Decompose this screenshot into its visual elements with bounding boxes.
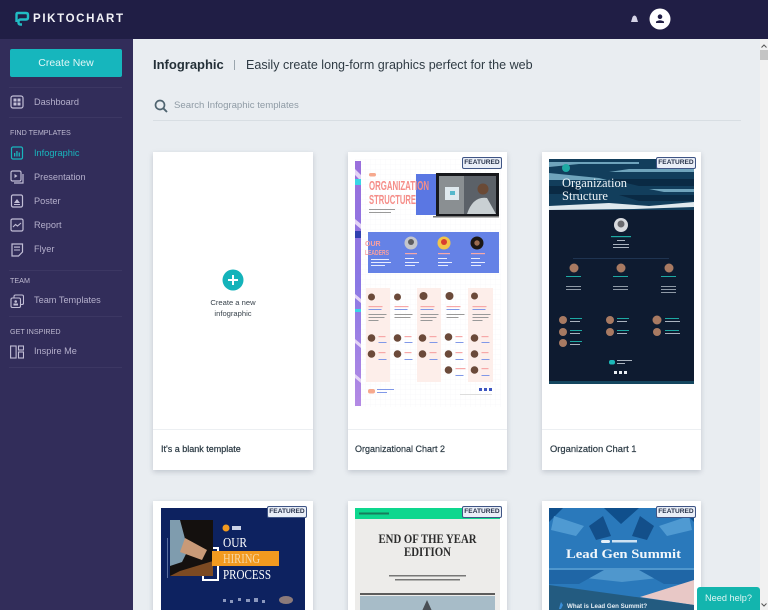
featured badge [656,157,696,169]
template thumbnail [355,161,499,406]
template thumbnail [355,508,500,610]
caption: Organization Chart 1 [550,443,637,454]
scrollbar [760,39,768,610]
template thumbnail: STRUCTURE [369,192,416,207]
scrollbar up arrow [761,44,767,48]
featured badge: FEATURED [464,159,500,166]
card: blank template [153,152,313,470]
card: organization chart 1 [542,152,701,470]
featured badge [462,157,502,169]
template thumbnail: PROCESS [223,568,271,583]
icon: report [10,218,24,232]
heading separator [234,60,235,70]
template thumbnail: HIRING [223,552,260,567]
section: team: TEAM [10,276,30,285]
create new label: Create a new [210,298,256,307]
nav: report: Report [34,220,62,230]
search placeholder: Search Infographic templates [174,100,299,111]
caption: It's a blank template [161,444,241,454]
template thumbnail [549,159,694,384]
caption: Organizational Chart 2 [355,444,445,454]
featured badge [267,506,307,518]
template title: END OF THE YEAR [378,532,477,546]
icon: infographic [10,146,24,160]
sidebar [0,39,133,610]
icon: flyer [11,243,24,257]
nav: flyer: Flyer [34,244,54,254]
icon: search [154,100,168,113]
template thumbnail: EDITION [404,545,451,559]
card: end of the year edition [348,501,507,610]
create new button: Create New [38,57,94,69]
nav: team templates: Team Templates [34,295,101,305]
template thumbnail: LEADERS [365,250,389,257]
icon: plus button [222,270,244,290]
icon: inspire me [10,345,24,359]
icon: presentation [10,170,24,184]
template title: OUR [223,536,248,551]
nav: dashboard: Dashboard [34,97,79,107]
scrollbar thumb [760,50,768,60]
create new label [210,298,256,318]
card: hiring process [153,501,313,610]
featured badge [656,506,696,518]
template thumbnail [549,508,694,610]
card: organizational chart 2 [348,152,507,470]
top navigation bar [0,0,768,39]
template title: Organization [562,176,628,190]
logo [15,12,30,26]
section: get inspired: GET INSPIRED [10,327,61,336]
featured badge: FEATURED [658,159,694,166]
need help button [697,587,760,610]
featured badge: FEATURED [269,508,305,515]
heading: Infographic [153,57,224,72]
nav: inspire me: Inspire Me [34,346,77,356]
scrollbar down arrow [761,603,767,607]
nav: poster: Poster [34,196,61,206]
template title: Lead Gen Summit [566,546,682,561]
template section heading: OUR [365,241,381,248]
pink team columns [366,288,390,382]
template thumbnail: What is Lead Gen Summit? [567,603,647,610]
featured badge [462,506,502,518]
icon: poster [10,194,24,208]
template thumbnail: Structure [562,189,608,203]
subheading: Easily create long-form graphics perfect for the web [246,58,533,72]
create new button [10,49,122,77]
search underline [153,120,741,121]
icon: notification bell [631,16,638,22]
icon: user avatar [650,8,670,30]
nav: infographic: Infographic [34,148,79,158]
brand name: PIKTOCHART [33,13,125,25]
template thumbnail [161,508,305,610]
card: lead gen summit [542,501,701,610]
section: find templates: FIND TEMPLATES [10,128,71,137]
template title: ORGANIZATION [369,178,429,193]
nav: presentation: Presentation [34,172,86,182]
featured badge: FEATURED [464,508,500,515]
icon: dashboard [10,95,24,109]
featured badge: FEATURED [658,508,694,515]
create new label: infographic [214,308,252,318]
icon: team templates [10,294,24,308]
need help button: Need help? [705,593,752,603]
